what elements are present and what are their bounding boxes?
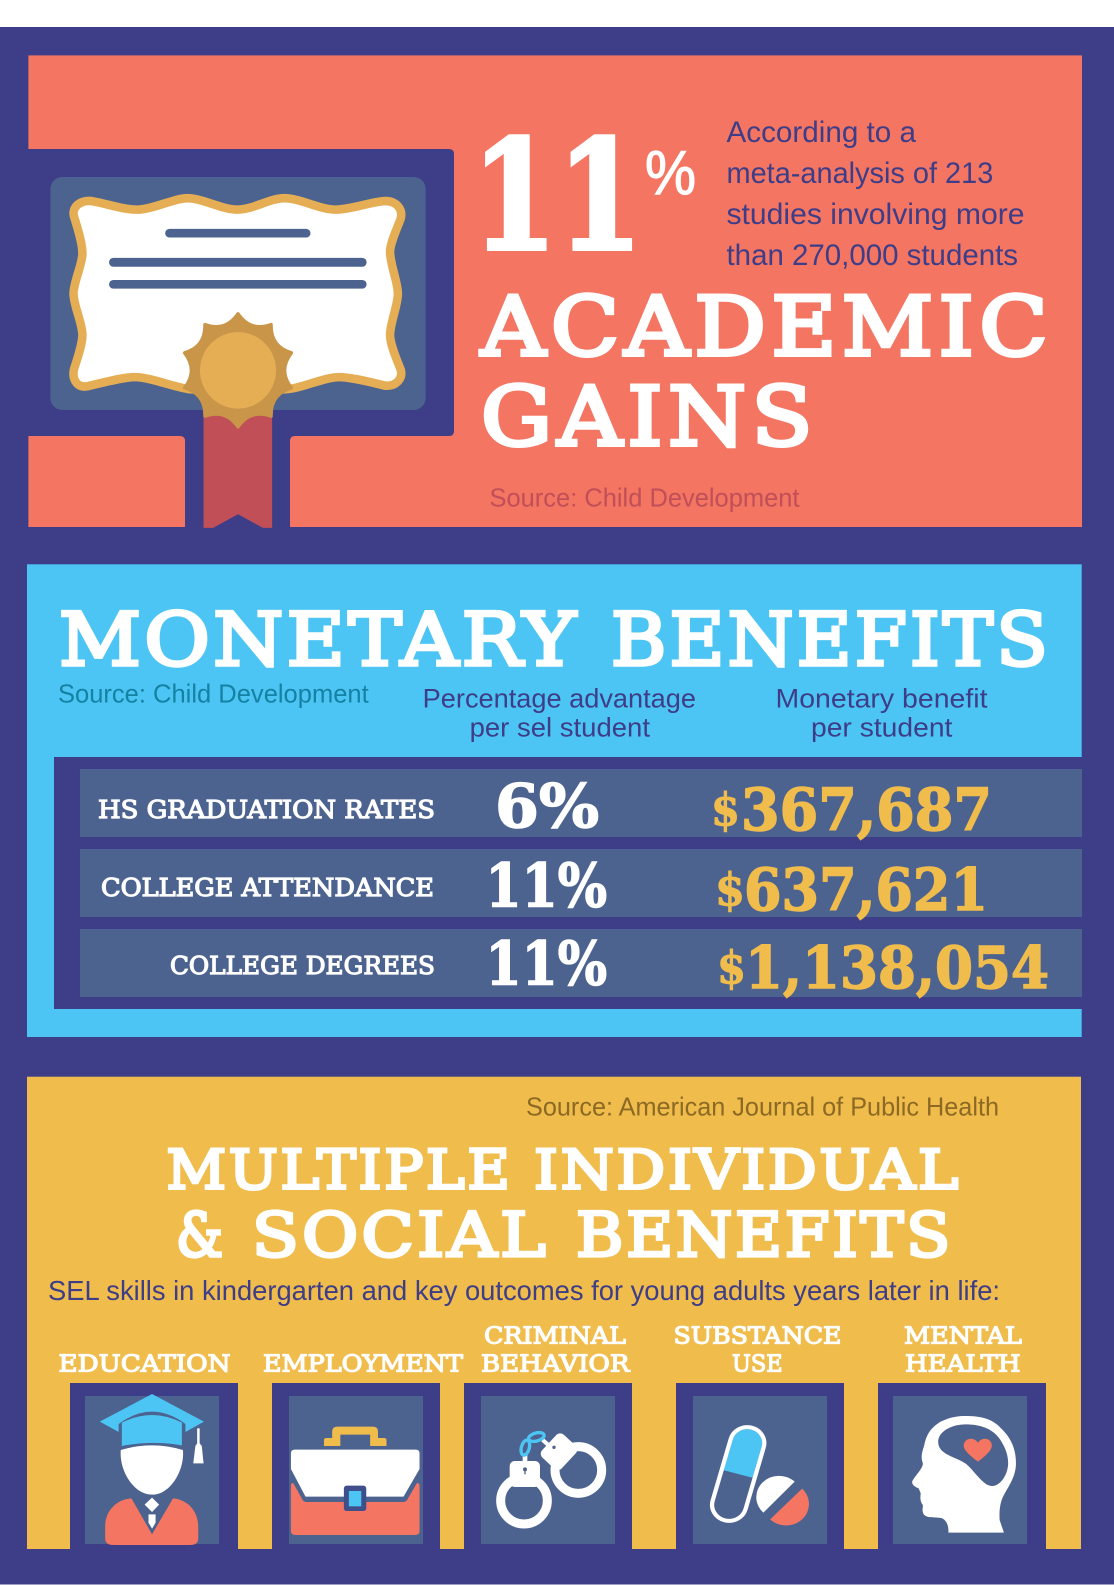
row: hs graduation rates: 367,687 — [741, 776, 992, 844]
column header: monetary benefit: Monetary benefit — [776, 684, 988, 714]
row: college degrees: 1,138,054 — [745, 934, 1049, 1002]
icon: head with heart — [878, 1383, 1046, 1549]
label: criminal behavior — [481, 1322, 631, 1378]
row: hs graduation rates — [80, 769, 1082, 844]
text: study description: studies involving more — [726, 198, 1024, 231]
label: substance use — [674, 1322, 842, 1378]
source: child development: Source: Child Development — [490, 482, 800, 512]
column header: percentage advantage: Percentage advantage — [423, 684, 696, 714]
column header: monetary benefit: per student — [811, 713, 953, 743]
heading: multiple individual and social benefits: MULTIPLE — [166, 1138, 512, 1202]
heading: multiple individual and social benefits: BENEFITS — [576, 1201, 953, 1271]
label: mental health: MENTAL — [904, 1322, 1022, 1350]
heading: monetary benefits — [59, 598, 1051, 683]
source: american journal of public health: Source: American Journal of Public Health — [526, 1092, 999, 1122]
stat: 11 percent: 11 — [472, 106, 643, 285]
stat: 11 percent: % — [645, 139, 696, 208]
label: employment: EMPLOYMENT — [263, 1350, 463, 1378]
heading: monetary benefits: BENEFITS — [611, 598, 1051, 683]
table frame — [54, 757, 1082, 1009]
column header: percentage advantage — [423, 684, 696, 743]
panel: multiple individual and social benefits — [27, 1077, 1081, 1549]
column header: monetary benefit — [776, 684, 988, 743]
label: education: EDUCATION — [58, 1350, 230, 1378]
label: criminal behavior: BEHAVIOR — [481, 1350, 631, 1378]
row: college attendance: 11% — [486, 851, 607, 921]
row: college attendance: COLLEGE ATTENDANCE — [101, 873, 434, 902]
row: college degrees — [80, 929, 1082, 1002]
row: college degrees: $ — [717, 941, 746, 994]
label: criminal behavior: CRIMINAL — [484, 1322, 626, 1350]
source: child development: Source: Child Development — [58, 679, 369, 709]
icon: pills — [676, 1383, 844, 1549]
icon: handcuffs — [464, 1383, 632, 1549]
yellow panel background — [27, 1077, 1081, 1549]
label: mental health — [904, 1322, 1022, 1378]
text: study description: than 270,000 students — [726, 239, 1018, 272]
row: hs graduation rates: 6% — [495, 772, 599, 842]
label: mental health: HEALTH — [905, 1350, 1021, 1378]
certificate navy frame — [28, 149, 454, 527]
icon: diploma certificate — [28, 149, 454, 528]
row: college attendance — [80, 849, 1082, 924]
text: study description: meta-analysis of 213 — [726, 157, 993, 190]
panel: academic gains — [28, 55, 1082, 528]
text: study description: According to a — [726, 116, 916, 149]
heading: multiple individual and social benefits: & — [176, 1201, 223, 1271]
diploma paper — [73, 198, 401, 528]
heading: academic gains — [480, 281, 1053, 465]
heading: multiple individual and social benefits: INDIVIDUAL — [534, 1138, 961, 1202]
icon: graduate — [70, 1383, 238, 1549]
label: substance use: SUBSTANCE — [674, 1322, 842, 1350]
row: college attendance: $ — [715, 863, 745, 916]
row: hs graduation rates: $ — [711, 783, 740, 836]
label: substance use: USE — [732, 1350, 783, 1378]
text: study description — [726, 116, 1024, 272]
blue panel background — [27, 564, 1082, 1037]
coral panel background — [28, 55, 1082, 527]
certificate slate backing — [50, 177, 426, 410]
column header: percentage advantage: per sel student — [470, 713, 651, 743]
heading: multiple individual and social benefits: SOCIAL — [252, 1201, 549, 1271]
panel: monetary benefits — [27, 564, 1082, 1037]
icon: briefcase — [272, 1383, 440, 1549]
row: hs graduation rates: HS GRADUATION RATES — [98, 795, 435, 824]
heading: monetary benefits: MONETARY — [59, 598, 579, 683]
heading: academic gains: GAINS — [481, 371, 818, 465]
row: college attendance: 637,621 — [744, 856, 988, 924]
heading: academic gains: ACADEMIC — [480, 281, 1053, 375]
row: college degrees: COLLEGE DEGREES — [170, 951, 435, 980]
heading: multiple individual and social benefits — [166, 1138, 961, 1271]
text: sel skills intro: SEL skills in kindergarten and key outcomes for young adults years later in life: — [48, 1275, 1000, 1306]
row: college degrees: 11% — [486, 929, 607, 999]
